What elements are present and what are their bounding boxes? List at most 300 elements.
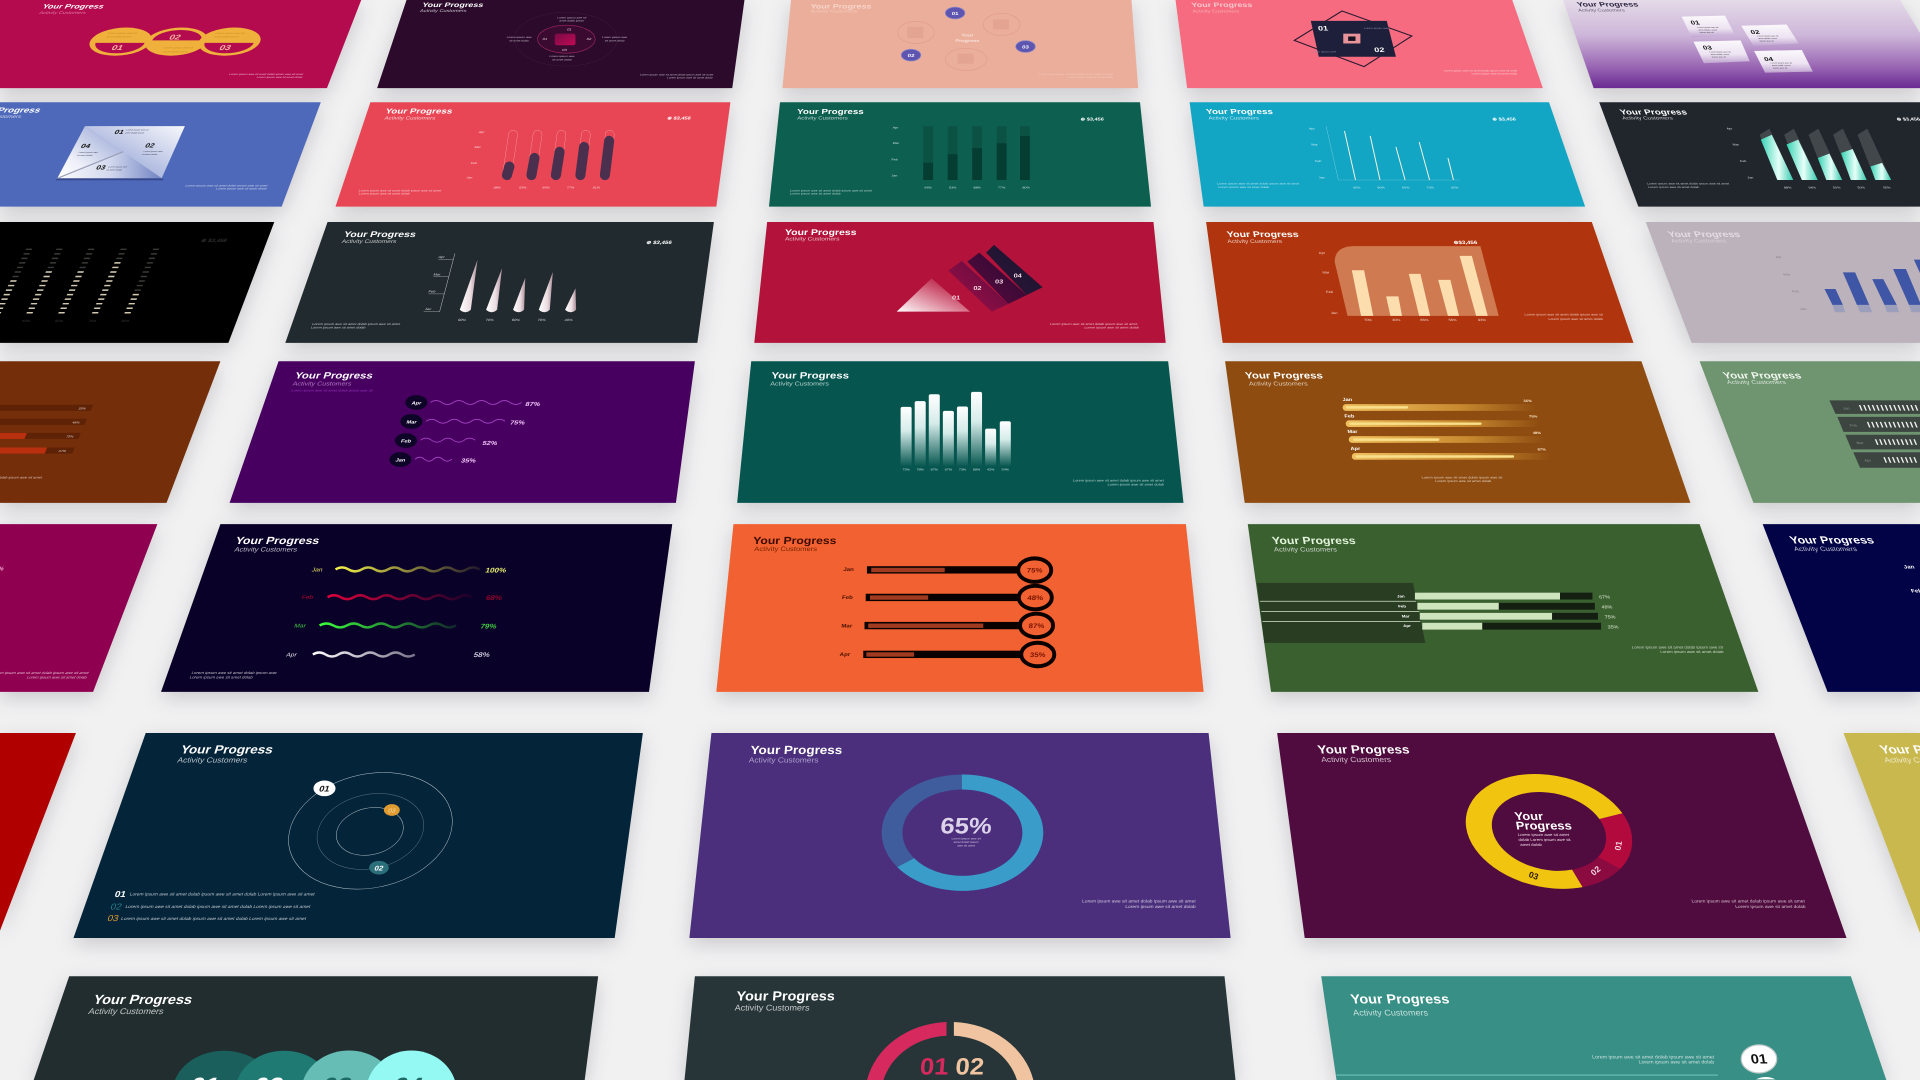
heading: [797, 107, 864, 121]
neon wave chart: 79%: [479, 622, 498, 630]
square diagram: [1294, 11, 1412, 67]
wave chart: Mar: [406, 420, 417, 425]
ring chart: Progress: [1515, 819, 1573, 832]
bar chart: [1775, 256, 1920, 312]
bar chart: Mar: [474, 145, 482, 149]
panel: rounded bars slide: [336, 102, 730, 207]
note: Lorem ipsum awe sit amet dolab ipsum awe sit: [291, 389, 373, 392]
panel: wavy lines slide: [230, 361, 695, 503]
caption: Lorem ipsum awe sit amet dolab ipsum awe sit amet: [1217, 182, 1300, 185]
heading: Your Progress: [343, 230, 417, 240]
diamond diagram: Lorem ipsum awe: [143, 151, 164, 153]
caption: Lorem ipsum awe sit amet dolab ipsum awe sit amet: [358, 189, 442, 192]
amount: ⊕ $3,456: [1492, 117, 1517, 122]
progress bars: 48%: [71, 421, 81, 424]
orbit diagram: 02: [373, 864, 385, 872]
line bar chart: 40%: [1451, 186, 1459, 189]
badge 01: [1741, 1045, 1777, 1073]
gauge bars: Apr: [839, 653, 851, 658]
column chart: 43%: [987, 468, 994, 471]
bar chart: Jan: [1799, 308, 1807, 311]
caption: [0, 670, 91, 680]
heading: Your Progress: [785, 228, 857, 238]
gold progress bars: Jan: [1342, 397, 1353, 403]
tick bars: Feb: [1849, 423, 1858, 427]
cycle diagram: Lorem ipsum awe sit: [557, 16, 587, 19]
gauge bars: 35%: [1030, 651, 1047, 659]
caption: Lorem ipsum awe sit amet dolab: [1067, 76, 1114, 79]
caption: [1050, 322, 1139, 329]
caption: Lorem ipsum awe sit amet dolab: [1647, 185, 1700, 189]
heading: Your Progress: [384, 107, 454, 115]
heading: Your Progress: [1244, 371, 1324, 381]
heading: [1576, 1, 1640, 13]
numbered list: 03: [106, 913, 120, 923]
heading: [419, 1, 485, 14]
heading: [1877, 743, 1920, 764]
ring chart: [1454, 770, 1644, 892]
caption: [1646, 182, 1730, 189]
cycle diagram: 02: [586, 38, 592, 41]
caption: Lorem ipsum awe sit amet dolab ipsum awe sit amet: [1646, 182, 1730, 185]
slanted bar chart: 50%: [1832, 186, 1841, 189]
heading: Activity Customers: [384, 116, 436, 121]
card 01: Lorem ipsum awe sit: [1697, 26, 1719, 29]
bar chart: Apr: [893, 126, 900, 129]
line bar chart: Apr: [1309, 127, 1316, 130]
caption: [228, 73, 304, 79]
caption: [1524, 313, 1603, 321]
ring chart: [867, 1022, 1033, 1080]
heading: Your Progress: [1576, 1, 1640, 8]
line bar chart: 80%: [1377, 186, 1385, 189]
panel: cone chart slide: [285, 222, 714, 343]
caption: Lorem ipsum awe sit amet dolab: [189, 675, 254, 680]
caption: [790, 189, 872, 195]
cycle diagram: Lorem ipsum awe: [602, 36, 628, 39]
bar chart: 55%: [1448, 319, 1458, 322]
cycle diagram: 04: [542, 38, 548, 41]
caption: [1039, 73, 1114, 79]
caption: Lorem ipsum awe sit amet dolab: [26, 675, 89, 680]
panel: interlocked rings slide: [0, 0, 361, 88]
card 01: 01: [1690, 21, 1701, 26]
slanted bar chart: 55%: [1883, 186, 1891, 189]
heading: [38, 3, 106, 15]
column chart: 73%: [902, 468, 910, 471]
caption: Lorem ipsum awe sit amet dolab ipsum awe sit amet: [312, 322, 401, 326]
heading: Your Progress: [736, 988, 836, 1003]
panel: sage tick bars slide: [1700, 361, 1920, 503]
heading: [1316, 743, 1410, 764]
heading: Activity Customers: [1670, 238, 1727, 244]
caption: [1217, 182, 1300, 189]
heading: [384, 107, 454, 121]
panel: yellow and crimson ring slide: [1277, 733, 1847, 938]
caption: [1082, 899, 1197, 909]
caption: Lorem ipsum awe sit amet dolab ipsum awe sit amet: [228, 73, 304, 76]
tick bars: Mar: [1855, 440, 1865, 445]
ring chart: amet dolab: [1520, 842, 1543, 847]
ring chart: 01: [919, 1054, 950, 1080]
heading: Activity Customers: [1227, 239, 1283, 245]
heading: Your Progress: [1226, 230, 1299, 240]
heading: [1349, 991, 1451, 1017]
heading: Activity Customers: [1726, 380, 1788, 386]
gold progress bars: [1342, 397, 1551, 460]
caption: Lorem ipsum awe sit amet dolab ipsum awe sit amet: [1073, 479, 1164, 482]
slanted bar chart: Feb: [1739, 159, 1747, 163]
card 02: amet dolab Lorem: [1758, 37, 1778, 40]
cone chart: 70%: [485, 319, 495, 322]
panel: glowing columns slide: [737, 361, 1183, 503]
bar chart: Feb: [891, 158, 898, 162]
caption: [1631, 645, 1725, 654]
heading: Activity Customers: [770, 381, 829, 387]
badge 02: [1756, 1077, 1776, 1079]
diamond diagram: 03: [95, 164, 108, 171]
card 04: amet dolab Lorem: [1771, 64, 1791, 67]
caption: Lorem ipsum awe sit amet dolab ipsum awe sit: [1524, 313, 1603, 317]
heading: [1788, 535, 1876, 553]
wave chart: Feb: [400, 439, 412, 444]
heading: [87, 993, 194, 1016]
donut chart: amet dolab ipsum: [953, 840, 979, 844]
cone chart: 70%: [537, 319, 547, 322]
rings diagram: amet dolab ipsum: [162, 50, 189, 53]
heading: Activity Customers: [785, 237, 840, 242]
slanted bar chart: Apr: [1726, 127, 1734, 130]
caption: Lorem ipsum awe sit amet dolab ipsum awe: [191, 670, 278, 675]
heading: Activity Customers: [797, 116, 848, 121]
bar chart: 53%: [949, 186, 957, 189]
panel: navy slide: [1763, 524, 1920, 692]
heading: Your Progress: [1349, 991, 1451, 1007]
heading: Activity Customers: [1352, 1008, 1429, 1017]
caption: Lorem ipsum awe sit amet dolab: [1638, 1060, 1715, 1065]
bubble diagram: 02: [907, 54, 915, 59]
square diagram: 01: [1317, 25, 1329, 32]
ring chart: 03: [1527, 869, 1540, 882]
ring chart: Lorem ipsum awe sit amet: [1517, 832, 1570, 837]
cycle diagram: Lorem ipsum awe: [549, 55, 576, 58]
layered triangles: 01: [952, 295, 961, 301]
caption: Lorem ipsum awe sit amet dolab: [1471, 72, 1518, 75]
cycle diagram: sit amet dolab: [604, 39, 626, 42]
heading: Activity Customers: [419, 9, 468, 14]
caption: Lorem ipsum awe sit amet dolab: [215, 187, 268, 190]
card 02: 02: [1750, 30, 1761, 35]
neon wave chart: 100%: [484, 566, 508, 574]
rings diagram: 01: [110, 44, 125, 51]
gold progress bars: 67%: [1537, 448, 1547, 452]
bar chart: 70%: [1364, 319, 1373, 322]
heading: [1205, 108, 1274, 121]
layered triangles: 04: [1013, 273, 1022, 279]
square diagram: Lorem ipsum awe: [1311, 50, 1337, 53]
bar chart: [1318, 246, 1499, 322]
cycle diagram: 03: [562, 48, 567, 52]
heading: Your Progress: [1721, 371, 1803, 381]
heading: Activity Customers: [748, 756, 819, 764]
bar chart: 66%: [542, 186, 550, 189]
heading: Your Progress: [1316, 743, 1410, 757]
panel: rotated square slide: [1176, 0, 1543, 88]
caption: [1443, 69, 1518, 75]
overlapping circles: [175, 1050, 455, 1080]
heading: Your Progress: [1788, 535, 1876, 546]
gauge bars: Jan: [843, 567, 855, 573]
segmented bar chart: 50%: [21, 319, 32, 323]
caption: [1691, 899, 1806, 909]
cone chart: Apr: [438, 256, 446, 259]
bar chart: Jan: [1331, 311, 1338, 315]
heading: [1666, 230, 1742, 244]
ring chart: dolab Lorem ipsum awe sit: [1518, 837, 1572, 842]
slanted bar chart: [1726, 127, 1891, 189]
caption: Lorem ipsum awe sit amet dolab: [1218, 185, 1270, 189]
amount: ⊕ $3,456: [666, 116, 692, 121]
rings diagram: amet dolab ipsum: [106, 35, 133, 38]
square diagram: Lorem ipsum awe: [1364, 27, 1390, 30]
tick bars: Apr: [1863, 458, 1872, 462]
heading: [748, 744, 843, 764]
caption: Lorem ipsum awe sit amet dolab ipsum awe sit amet: [790, 189, 872, 192]
heading: Your Progress: [753, 536, 837, 546]
bar chart: Feb: [1791, 290, 1800, 293]
caption: Lorem ipsum awe sit amet dolab ipsum awe sit amet: [1039, 73, 1113, 76]
heading: Your Progress: [1666, 230, 1742, 239]
neon wave chart: Feb: [301, 595, 315, 601]
diamond diagram: [56, 126, 185, 180]
rings diagram: Lorem ipsum awe sit: [107, 32, 138, 35]
neon wave chart: Jan: [311, 567, 324, 573]
heading: [753, 536, 837, 553]
panel: reflected bars slide: [1646, 222, 1920, 343]
bar chart: 88%: [973, 186, 981, 189]
caption: Lorem ipsum awe sit amet dolab ipsum awe sit amet: [1082, 899, 1197, 903]
table bars: 67%: [1599, 595, 1611, 600]
heading: Your Progress: [810, 3, 872, 10]
ring chart: 02: [1589, 864, 1603, 878]
amount: ⊕ $3,456: [1080, 117, 1104, 122]
line bar chart: Feb: [1315, 159, 1322, 163]
rings diagram: Lorem ipsum awe sit: [163, 46, 194, 49]
gold progress bars: 35%: [1523, 399, 1533, 403]
month labels: Jan: [1903, 565, 1916, 570]
caption: [358, 189, 442, 195]
wave chart: 52%: [482, 440, 498, 447]
heading: Activity Customers: [38, 11, 87, 15]
panel: cycle diagram slide: [377, 0, 744, 88]
wave chart: [389, 395, 541, 467]
table bars: [1257, 583, 1620, 643]
column chart: 88%: [973, 468, 980, 471]
bar chart: 77%: [566, 186, 575, 189]
card 04: ipsum awe sit: [1773, 67, 1788, 69]
wave chart: Apr: [411, 401, 422, 406]
numbered list: 02: [109, 901, 123, 911]
card 03: amet dolab Lorem: [1710, 53, 1730, 56]
slanted bar chart: Jan: [1747, 176, 1754, 179]
cone chart: [424, 253, 576, 322]
diamond diagram: sit amet dolab: [106, 169, 123, 171]
rings diagram: 02: [167, 33, 183, 41]
bar chart: 30%: [1392, 319, 1401, 322]
line bar chart: 70%: [1426, 186, 1434, 189]
heading: [770, 371, 850, 387]
square diagram: 02: [1374, 46, 1386, 53]
numbered list: Lorem ipsum awe sit amet dolab ipsum awe sit amet dolab Lorem ipsum awe sit amet: [121, 916, 308, 921]
panel: bubbles slide: [782, 0, 1138, 88]
heading: [1191, 1, 1254, 14]
table bars: Feb: [1398, 604, 1407, 608]
cycle diagram: sit amet dolab: [509, 39, 530, 42]
caption: [1073, 479, 1164, 486]
heading: [1721, 371, 1803, 386]
cone chart: 60%: [511, 319, 521, 322]
card 04: 04: [1763, 57, 1774, 62]
donut chart: 65%: [939, 814, 993, 839]
bar chart: 77%: [998, 186, 1006, 189]
segmented bar chart: 60%: [54, 319, 65, 323]
panel: slanted teal bars slide: [1599, 102, 1920, 207]
cycle diagram: [506, 12, 628, 66]
segmented bar chart: 75%: [87, 319, 98, 323]
progress bars: [0, 405, 93, 454]
wave chart: 87%: [524, 402, 541, 408]
cone chart: Jan: [424, 308, 432, 311]
caption: Lorem ipsum awe sit amet dolab ipsum awe sit amet: [1691, 899, 1806, 903]
gauge bars: [839, 558, 1054, 666]
progress bars: 75%: [65, 435, 74, 438]
numbered list: 01: [114, 889, 128, 899]
column chart: 67%: [945, 468, 952, 471]
caption: Lorem ipsum awe sit amet dolab: [1660, 649, 1725, 654]
heading: [810, 3, 872, 14]
panel: four cards slide: [1563, 0, 1920, 88]
progress bars: 35%: [77, 407, 87, 410]
heading: Your Progress: [179, 743, 275, 756]
gauge bars: Mar: [841, 624, 853, 629]
bar chart: Apr: [1318, 251, 1326, 255]
bar chart: Apr: [478, 131, 486, 134]
card 03: [1693, 40, 1750, 63]
layered triangles: 02: [973, 285, 982, 292]
panel: layered triangles slide: [754, 222, 1166, 343]
neon wave chart: Mar: [293, 623, 307, 629]
diamond diagram: Lorem ipsum awe: [78, 152, 99, 154]
line bar chart: Jan: [1318, 176, 1325, 179]
caption: Lorem ipsum awe sit amet dolab: [310, 326, 366, 329]
panel: two-tone ring slide: [684, 976, 1236, 1080]
heading: [1244, 371, 1324, 387]
amount: ⊕ $3,456: [200, 239, 229, 244]
caption: Lorem ipsum awe sit amet dolab ipsum awe sit amet: [639, 73, 714, 76]
ring chart: 02: [954, 1054, 985, 1080]
panel: orbit slide: [73, 733, 643, 938]
heading: [1226, 230, 1299, 245]
slanted bar chart: Mar: [1732, 143, 1741, 146]
heading: Activity Customers: [1192, 9, 1240, 14]
heading: Activity Customers: [233, 546, 299, 553]
heading: [292, 371, 374, 387]
bar chart: 38%: [493, 186, 501, 189]
gauge bars: Feb: [842, 596, 854, 601]
heading: [1618, 108, 1688, 121]
heading: Activity Customers: [1577, 8, 1626, 13]
diamond diagram: amet dolab ipsum: [124, 132, 145, 134]
diamond diagram: sit amet dolab: [76, 154, 94, 157]
numbered list: Lorem ipsum awe sit amet dolab ipsum awe sit amet dolab Lorem ipsum awe sit amet: [125, 904, 312, 909]
bar chart: Mar: [893, 142, 900, 145]
bar chart: 80%: [1022, 186, 1030, 189]
month labels: [1903, 565, 1920, 594]
neon wave chart: 68%: [485, 594, 504, 602]
bar chart: 53%: [519, 186, 527, 189]
heading: Activity Customers: [1208, 116, 1260, 121]
heading: Activity Customers: [1621, 116, 1674, 121]
column chart: [901, 392, 1011, 471]
heading: [785, 228, 857, 242]
caption: Lorem ipsum awe sit amet dolab: [1084, 326, 1139, 329]
heading: [233, 536, 321, 553]
caption: [184, 184, 269, 190]
rings diagram: [84, 28, 265, 56]
bar chart: 93%: [1478, 319, 1487, 322]
bar chart: 66%: [924, 186, 932, 189]
column chart: 78%: [916, 468, 924, 471]
card 03: ipsum awe sit: [1711, 56, 1727, 58]
tick bars: [1829, 400, 1920, 468]
bar chart: 91%: [592, 186, 601, 189]
heading: Your Progress: [750, 744, 843, 757]
bar chart: Feb: [1326, 290, 1333, 294]
panel: red slide: [0, 733, 76, 931]
column chart: 54%: [1001, 468, 1009, 471]
caption: [1592, 1055, 1715, 1065]
orbit diagram: [276, 773, 464, 889]
card 02: ipsum awe sit: [1759, 40, 1775, 42]
wave chart: 75%: [509, 420, 526, 426]
heading: Activity Customers: [1248, 381, 1308, 387]
gold progress bars: Apr: [1350, 446, 1361, 452]
heading: [0, 106, 43, 120]
rings diagram: Lorem ipsum awe sit: [215, 32, 246, 35]
heading: Activity Customers: [292, 381, 353, 387]
neon wave chart: Apr: [285, 652, 298, 658]
slanted bar chart: 88%: [1783, 186, 1792, 189]
panel: green table bars slide: [1248, 524, 1758, 692]
card 01: [1682, 16, 1735, 37]
neon wave chart: [285, 566, 508, 659]
heading: Activity Customers: [1274, 547, 1338, 553]
numbered list: Lorem ipsum awe sit amet dolab ipsum awe sit amet dolab Lorem ipsum awe sit amet: [129, 892, 316, 896]
amount: ⊕$3,456: [1453, 241, 1478, 246]
cycle diagram: amet dolab ipsum: [559, 19, 586, 23]
layered triangles: [897, 245, 1043, 312]
bar chart: 65%: [1420, 319, 1430, 322]
heading: Activity Customers: [341, 239, 397, 245]
segmented bar chart: [0, 246, 157, 323]
diamond diagram: 04: [79, 142, 93, 150]
panel: magenta slide: [0, 524, 157, 692]
bubble diagram: Progress: [955, 39, 980, 44]
segmented bar chart: 30%: [120, 319, 131, 323]
caption: Lorem ipsum awe sit amet dolab: [667, 76, 714, 79]
heading: Activity Customers: [87, 1007, 166, 1016]
card 04: Lorem ipsum awe sit: [1770, 62, 1793, 64]
